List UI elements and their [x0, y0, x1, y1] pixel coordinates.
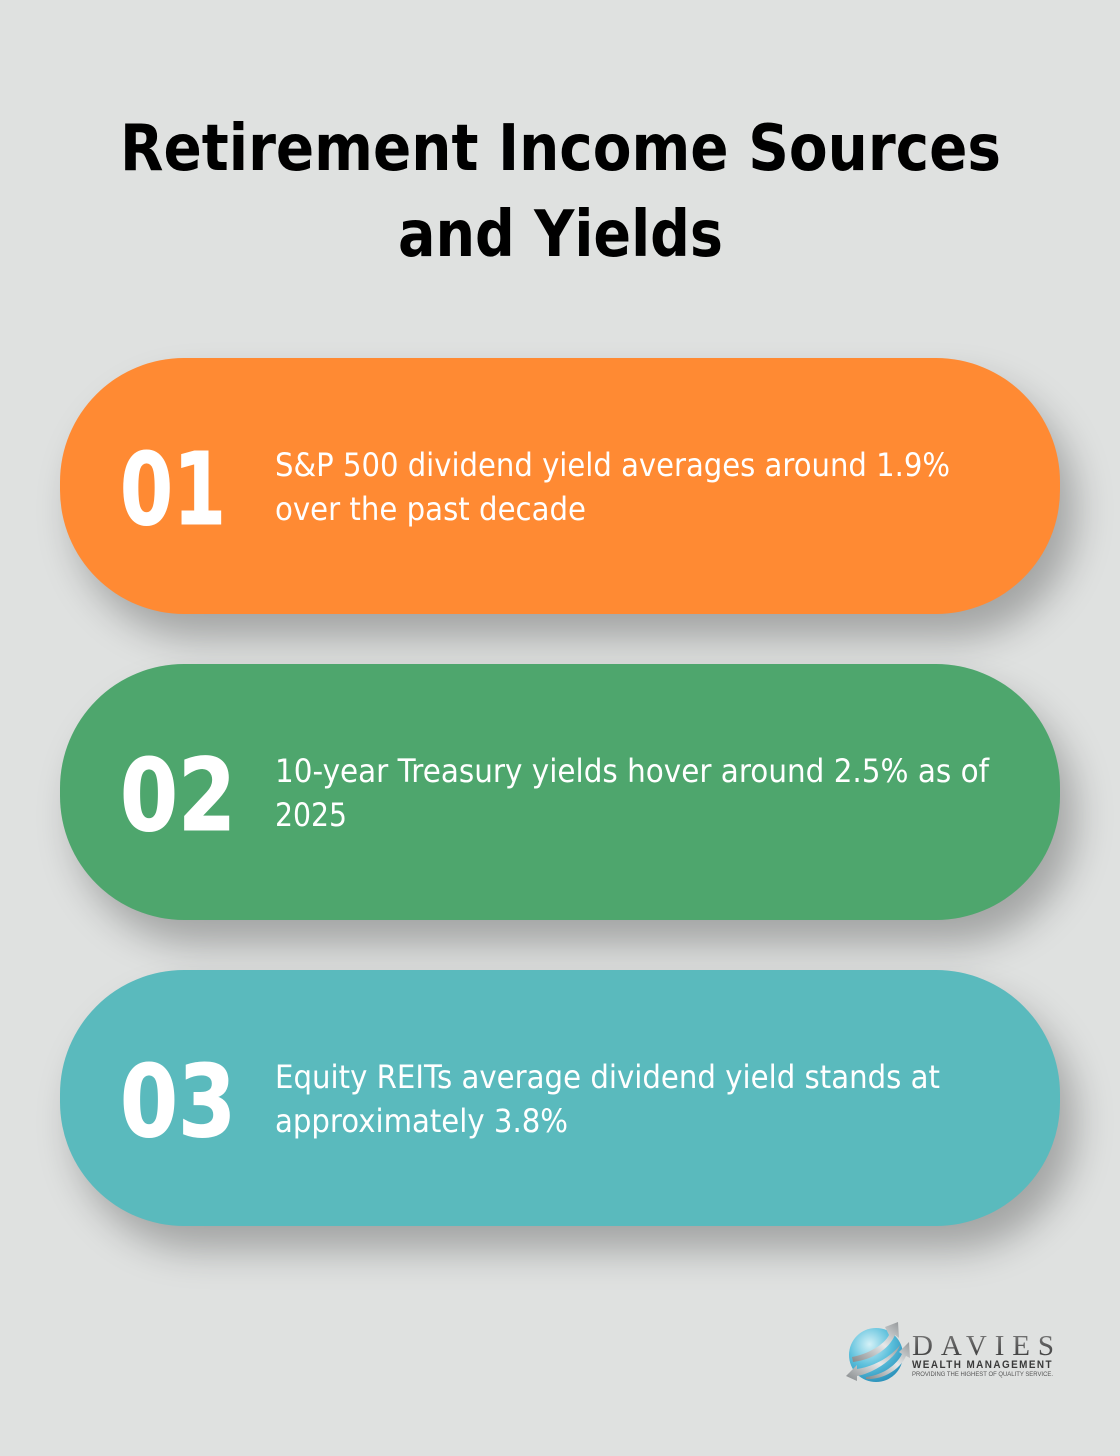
icon: globe with arrows	[846, 1322, 910, 1382]
card 01 content	[120, 431, 950, 548]
card 03 content	[120, 1043, 940, 1160]
card 03 text: approximately 3.8%	[275, 1102, 568, 1140]
panel: teal card background	[60, 970, 1060, 1226]
panel: green card background	[60, 664, 1060, 920]
card 01 text: S&P 500 dividend yield averages around 1.9%	[275, 446, 950, 484]
card 02 text: 10-year Treasury yields hover around 2.5% as of	[275, 752, 990, 790]
card 02 text	[275, 752, 990, 834]
title: Retirement Income Sources	[120, 112, 1001, 186]
number 01: 01	[120, 431, 226, 548]
logo: Davies Wealth Management	[846, 1322, 1054, 1382]
logo name: DAVIES	[912, 1330, 1054, 1362]
number 02: 02	[120, 737, 236, 854]
card 01 text: over the past decade	[275, 490, 586, 528]
title: and Yields	[398, 198, 723, 272]
card 03 text: Equity REITs average dividend yield stands at	[275, 1058, 940, 1096]
logo tagline: PROVIDING THE HIGHEST OF QUALITY SERVICE.	[912, 1372, 1053, 1378]
panel: orange card background	[60, 358, 1060, 614]
logo subtitle: WEALTH MANAGEMENT	[912, 1359, 1053, 1371]
card 01 text	[275, 446, 950, 528]
card 03 text	[275, 1058, 940, 1140]
card 02 text: 2025	[275, 796, 347, 834]
card 02 content	[120, 737, 990, 854]
number 03: 03	[120, 1043, 236, 1160]
title	[120, 112, 1001, 272]
